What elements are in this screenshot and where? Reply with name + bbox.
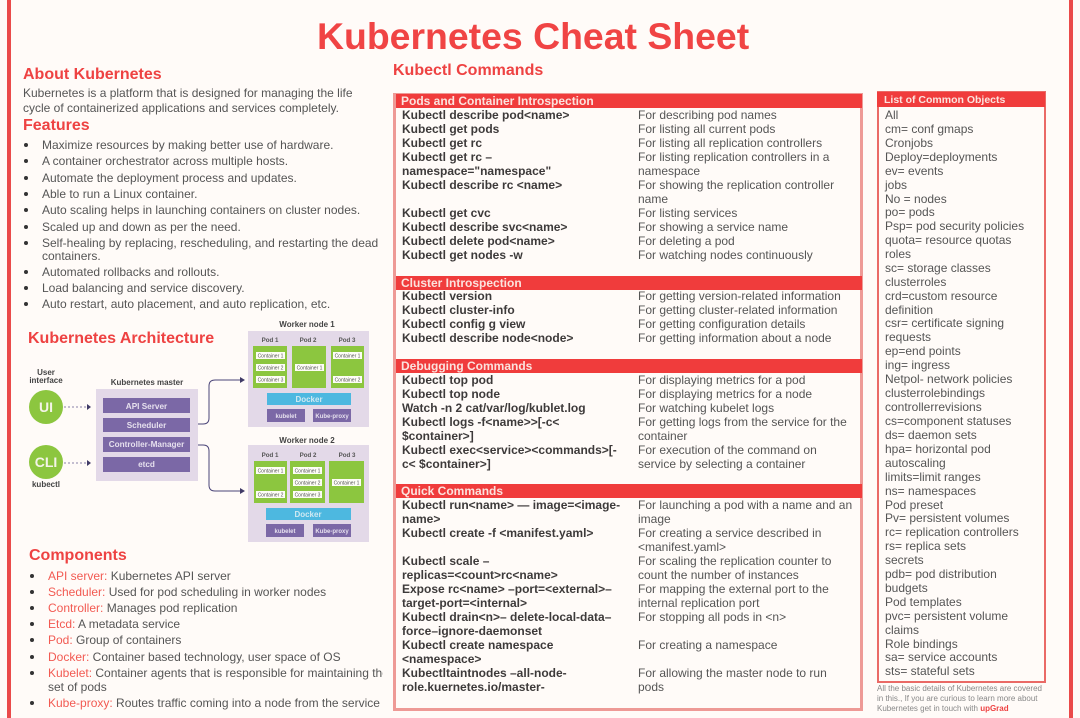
commands table: Kubectl cluster-info [402,303,515,317]
objects header: List of Common Objects [884,94,1005,106]
commands table: c< $container>] [402,457,491,471]
commands table: For describing pod names [638,108,777,122]
commands table: Kubectl scale – [402,554,489,568]
commands table: replicas=<count>rc<name> [402,568,558,582]
panel: list of common objects: secrets [885,553,924,567]
commands table: Kubectl get rc [402,136,482,150]
panel: list of common objects: rc= replication controllers [885,525,1019,539]
commands table: <manifest.yaml> [638,540,726,554]
panel: list of common objects: clusterrolebindings [885,386,985,400]
section: pods and container introspection: Pods and Container Introspection [401,94,594,108]
commands table: Kubectl logs -f<name>>[-c< [402,415,559,429]
panel: list of common objects: Pod preset [885,498,943,512]
commands table: For mapping the external port to the [638,582,829,596]
worker node 2: Container 3 [295,492,321,498]
worker node 1: Docker [295,395,323,404]
features list: containers. [42,249,101,263]
panel: list of common objects: ns= namespaces [885,484,976,498]
commands table: Expose rc<name> –port=<external>– [402,582,612,596]
panel: list of common objects: sc= storage classes [885,261,991,275]
commands table: For allowing the master node to run [638,666,827,680]
panel: list of common objects: ev= events [885,164,943,178]
user interface circles: CLI [35,454,57,470]
commands table: Kubectl top node [402,387,500,401]
panel: list of common objects: sts= stateful sets [885,664,975,678]
commands table: Kubectl describe pod<name> [402,108,569,122]
kubernetes master: API Server [126,402,168,411]
section: quick commands: Quick Commands [401,484,503,498]
panel: list of common objects: ds= daemon sets [885,428,977,442]
commands table: For execution of the command on [638,443,817,457]
heading: components: Components [29,547,127,564]
user interface circles: User [37,368,55,377]
commands table: For getting version-related information [638,289,841,303]
worker node 2: Container 1 [258,468,284,474]
user interface circles [29,368,91,489]
commands table: For launching a pod with a name and an [638,498,852,512]
panel: list of common objects: clusterroles [885,275,946,289]
worker node 2: Worker node 2 [279,436,335,445]
commands table: name [638,192,668,206]
section: pods and container introspection [396,94,862,108]
commands table: For getting information about a node [638,331,831,345]
commands table: For stopping all pods in <n> [638,610,786,624]
panel: list of common objects: sa= service accounts [885,650,997,664]
commands table: pods [638,680,664,694]
worker node 2: Container 2 [295,480,321,486]
objects outline [877,91,1046,683]
worker node 2: Container 1 [295,468,321,474]
panel: list of common objects: po= pods [885,205,935,219]
commands table: Kubectl config g view [402,317,525,331]
commands table: Kubectltaintnodes –all-node- [402,666,567,680]
worker node 1: Container 2 [258,366,284,372]
kubernetes master: Scheduler [127,421,167,430]
user interface circles: UI [39,399,53,415]
commands table: Kubectl describe svc<name> [402,220,567,234]
worker node 1: Worker node 1 [279,320,335,329]
commands table: For listing replication controllers in a [638,150,829,164]
commands table: For deleting a pod [638,234,735,248]
commands table: For getting logs from the service for the [638,415,847,429]
components list: Kube-proxy: Routes traffic coming into a node from the service [48,696,380,710]
commands table: For getting configuration details [638,317,805,331]
worker node 1: Container 1 [258,354,284,360]
components list: set of pods [48,680,107,694]
heading: architecture: Kubernetes Architecture [28,330,214,347]
commands table: For listing all current pods [638,122,775,136]
about text [23,86,353,115]
left page border [7,0,11,718]
panel: list of common objects: definition [885,303,933,317]
commands table: namespace [638,164,700,178]
panel: list of common objects: No = nodes [885,192,947,206]
right page border [1069,0,1073,718]
commands table: For creating a service described in [638,526,821,540]
worker node 2: Kube-proxy [315,529,349,535]
panel: list of common objects: jobs [885,178,907,192]
user interface circles: interface [29,376,63,385]
features list [24,138,378,311]
about text: cycle of containerized applications and services completely. [23,101,339,115]
panel: list of common objects: Pod templates [885,595,962,609]
panel: list of common objects: csr= certificate signing [885,316,1004,330]
commands table: namespace="namespace" [402,164,551,178]
commands table: name> [402,512,440,526]
commands table: For listing services [638,206,737,220]
panel: list of common objects: limits=limit ranges [885,470,981,484]
section: cluster introspection [396,276,862,290]
commands table: Kubectl get nodes -w [402,248,523,262]
panel: list of common objects: claims [885,623,919,637]
commands table: Kubectl get rc – [402,150,492,164]
features list: Automate the deployment process and updates. [42,171,297,185]
commands table: <namespace> [402,652,481,666]
commands table: count the number of instances [638,568,799,582]
footer note: in this., If you are curious to learn more about [877,694,1038,703]
heading: about: About Kubernetes [23,66,162,83]
commands table: For scaling the replication counter to [638,554,831,568]
worker node 1: Container 1 [297,366,323,372]
commands table: $container>] [402,429,474,443]
architecture diagram [29,320,369,542]
commands table: For listing all replication controllers [638,136,822,150]
commands table: Kubectl create -f <manifest.yaml> [402,526,593,540]
panel: list of common objects: Pv= persistent volumes [885,511,1009,525]
commands table: service by selecting a container [638,457,805,471]
commands table: Kubectl exec<service><commands>[- [402,443,617,457]
commands table: role.kuernetes.io/master- [402,680,545,694]
features list: Able to run a Linux container. [42,187,197,201]
footer note [877,684,1042,713]
components list: API server: Kubernetes API server [48,569,231,583]
panel: list of common objects: Role bindings [885,637,958,651]
features list: Scaled up and down as per the need. [42,220,241,234]
features list: A container orchestrator across multiple hosts. [42,154,288,168]
commands table: For watching kubelet logs [638,401,774,415]
commands table: Kubectl get pods [402,122,499,136]
components list: Pod: Group of containers [48,633,181,647]
table outline [393,93,863,711]
commands table: For displaying metrics for a node [638,387,812,401]
title: Kubernetes Cheat Sheet [317,15,749,57]
commands table: Kubectl drain<n>– delete-local-data– [402,610,611,624]
features list: Auto restart, auto placement, and auto replication, etc. [42,297,330,311]
worker node 2: Container 1 [334,480,360,486]
panel: list of common objects: Deploy=deployments [885,150,997,164]
panel: list of common objects: Psp= pod security policies [885,219,1024,233]
worker node 1: Pod 2 [300,337,317,344]
commands table: image [638,512,671,526]
kubernetes master [96,378,198,481]
panel: list of common objects: cs=component statuses [885,414,1011,428]
worker node 2 [248,436,369,542]
kubernetes master: Controller-Manager [109,440,185,449]
features list: Load balancing and service discovery. [42,281,245,295]
worker node 2: Pod 2 [300,452,317,459]
commands table: For creating a namespace [638,638,777,652]
section: cluster introspection: Cluster Introspection [401,276,522,290]
components list: Kubelet: Container agents that is responsible for maintaining the [48,666,383,680]
commands table: For getting cluster-related information [638,303,837,317]
heading: features: Features [23,117,90,134]
panel: list of common objects: ep=end points [885,344,961,358]
commands table: For displaying metrics for a pod [638,373,805,387]
worker node 1: Pod 3 [339,337,356,344]
commands table: For watching nodes continuously [638,248,813,262]
panel: list of common objects: All [885,108,898,122]
panel: list of common objects: autoscaling [885,456,946,470]
panel: list of common objects: pvc= persistent volume [885,609,1008,623]
commands table: For showing the replication controller [638,178,834,192]
commands table: Kubectl get cvc [402,206,491,220]
worker node 2: Pod 3 [339,452,356,459]
worker node 1: Container 1 [335,354,361,360]
components list: Etcd: A metadata service [48,617,180,631]
features list: Auto scaling helps in launching containers on cluster nodes. [42,203,360,217]
panel: list of common objects: controllerrevisions [885,400,982,414]
commands table: Kubectl delete pod<name> [402,234,555,248]
worker node 2: Docker [294,510,322,519]
commands table: Watch -n 2 cat/var/log/kublet.log [402,401,586,415]
features list: Automated rollbacks and rollouts. [42,265,219,279]
panel: list of common objects: hpa= horizontal pod [885,442,991,456]
panel: list of common objects: quota= resource quotas [885,233,1011,247]
worker node 1: Kube-proxy [315,414,349,420]
panel: list of common objects: Netpol- network policies [885,372,1012,386]
commands table: Kubectl describe node<node> [402,331,573,345]
worker node 1: Pod 1 [262,337,279,344]
panel: list of common objects: roles [885,247,911,261]
worker node 1 [248,320,369,427]
commands table: For showing a service name [638,220,788,234]
commands table: Kubectl version [402,289,492,303]
panel: list of common objects: Cronjobs [885,136,933,150]
worker node 2: kubelet [274,529,296,535]
commands table: internal replication port [638,596,759,610]
commands table: force–ignore-daemonset [402,624,542,638]
kubernetes master: Kubernetes master [111,378,183,387]
worker node 1: Container 3 [258,378,284,384]
commands table: Kubectl create namespace [402,638,553,652]
objects header [877,92,1045,107]
section: debugging commands: Debugging Commands [401,359,532,373]
panel: list of common objects: budgets [885,581,928,595]
worker node 1: Container 2 [335,378,361,384]
section: debugging commands [396,359,862,373]
worker node 2: Container 2 [258,492,284,498]
features list: Self-healing by replacing, rescheduling, and restarting the dead [42,236,378,250]
commands table: Kubectl run<name> — image=<image- [402,498,620,512]
commands table: target-port=<internal> [402,596,527,610]
components list: Scheduler: Used for pod scheduling in worker nodes [48,585,326,599]
commands table: Kubectl describe rc <name> [402,178,562,192]
components list [30,569,383,710]
commands table: Kubectl top pod [402,373,493,387]
components list: Controller: Manages pod replication [48,601,237,615]
features list: Maximize resources by making better use of hardware. [42,138,333,152]
commands table: container [638,429,687,443]
worker node 2: Pod 1 [262,452,279,459]
panel: list of common objects: rs= replica sets [885,539,966,553]
panel: list of common objects: crd=custom resource [885,289,997,303]
heading: kubectl commands: Kubectl Commands [393,62,543,79]
kubernetes master: etcd [138,460,155,469]
worker node 1: kubelet [275,414,297,420]
panel: list of common objects: pdb= pod distribution [885,567,997,581]
section: quick commands [396,484,862,498]
components list: Docker: Container based technology, user space of OS [48,650,341,664]
panel: list of common objects: ing= ingress [885,358,950,372]
footer note: Kubernetes get in touch with upGrad [877,704,1009,713]
about text: Kubernetes is a platform that is designed for managing the life [23,86,353,100]
panel: list of common objects: cm= conf gmaps [885,122,973,136]
panel: list of common objects: requests [885,330,931,344]
footer note: All the basic details of Kubernetes are covered [877,684,1042,693]
user interface circles: kubectl [32,480,60,489]
arrows to worker nodes [198,377,245,494]
